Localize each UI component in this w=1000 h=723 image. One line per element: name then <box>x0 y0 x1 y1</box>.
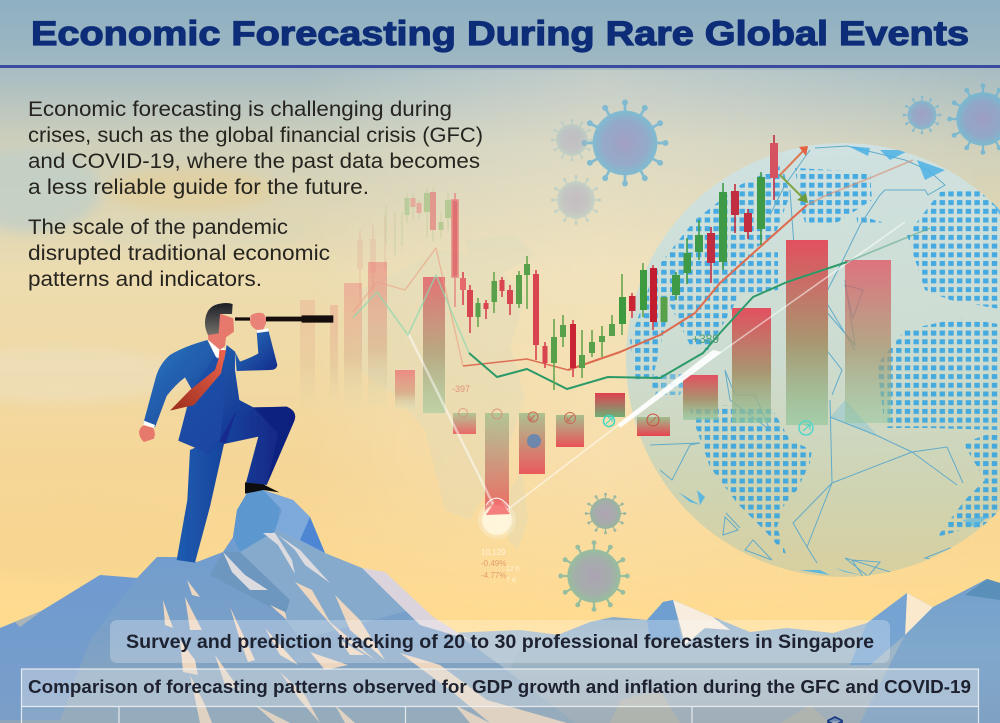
chart value labels: +389 <box>692 332 719 346</box>
icon: cube <box>828 717 842 723</box>
shirt <box>208 340 236 410</box>
chart value labels: -0.49% <box>481 559 506 568</box>
red trend line <box>353 160 913 370</box>
chart value labels: 12 h <box>506 566 520 573</box>
chart value labels: -4.77% <box>481 571 506 580</box>
header band <box>0 0 1000 68</box>
clouds <box>0 148 310 580</box>
man with telescope <box>139 303 333 563</box>
tie <box>170 350 226 411</box>
chart value labels: 10,129 <box>481 548 506 557</box>
chart value labels: 7 d <box>506 577 516 584</box>
mountains left <box>0 490 575 723</box>
arrows up and down <box>780 146 808 203</box>
survey banner: Survey and prediction tracking of 20 to 30 professional forecasters in Singapore <box>126 632 874 653</box>
globe dotted continents <box>630 165 1000 557</box>
white light beams <box>408 222 905 539</box>
telescope <box>235 315 333 323</box>
intro text block: Economic forecasting is challenging during <box>28 98 452 121</box>
table heading: Comparison of forecasting patterns observed for GDP growth and inflation during the GFC and COVID-19 <box>28 676 971 697</box>
head <box>207 313 234 350</box>
pandemic text block <box>28 216 330 291</box>
pandemic text block: The scale of the pandemic <box>28 216 288 239</box>
survey banner <box>110 620 890 663</box>
cuffs <box>143 328 269 428</box>
chart value labels: -397 <box>452 384 470 394</box>
hands <box>139 425 155 442</box>
jacket <box>143 340 253 454</box>
intro text block <box>28 98 483 199</box>
snow patches <box>163 533 567 723</box>
virus icons <box>551 84 1000 611</box>
hair <box>205 303 233 335</box>
candlestick chart <box>358 135 778 390</box>
intro text block: and COVID-19, where the past data becomes <box>28 150 480 173</box>
comparison table <box>22 669 978 723</box>
bar chart columns <box>300 240 891 515</box>
shoe <box>245 482 279 494</box>
title: Economic Forecasting During Rare Global Events <box>31 15 969 53</box>
blue globe marker <box>527 434 541 448</box>
raised arm <box>235 330 277 371</box>
chart value labels <box>452 332 719 584</box>
mountains middle ridge <box>400 630 660 723</box>
pandemic text block: disrupted traditional economic <box>28 242 330 265</box>
globe <box>626 143 1000 580</box>
mountains right <box>480 579 1000 723</box>
standing leg and raised leg <box>177 407 295 563</box>
intro text block: crises, such as the global financial crisis (GFC) <box>28 124 483 147</box>
globe polygon network <box>650 146 975 580</box>
faint world map <box>360 235 535 550</box>
green trend line <box>353 228 930 389</box>
small bar arrow icons <box>458 408 813 435</box>
pandemic text block: patterns and indicators. <box>28 268 262 291</box>
intro text block: a less reliable guide for the future. <box>28 176 369 199</box>
